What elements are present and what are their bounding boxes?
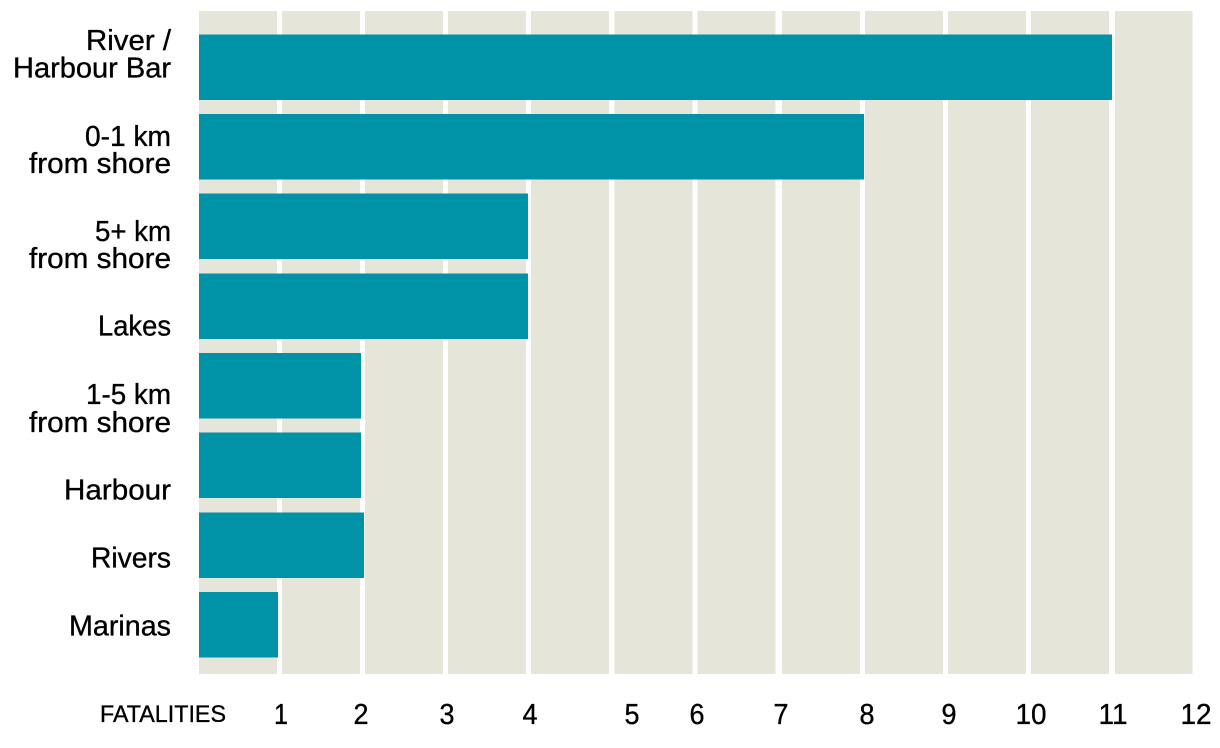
axis tick labels: 3 [440,699,454,731]
axis tick labels: 6 [690,699,704,731]
axis tick labels: 10 [1016,699,1046,731]
category labels [13,25,172,642]
axis tick labels: 11 [1098,699,1128,731]
category labels: Marinas [69,610,171,642]
category labels: from shore [29,243,171,275]
category labels: 5+ km [95,216,171,248]
axis tick labels: 1 [274,699,288,731]
category labels: Lakes [98,310,171,342]
bars [199,34,1112,658]
axis tick labels: 7 [774,699,788,731]
category labels: 1-5 km [86,379,171,411]
category labels: Rivers [91,542,171,574]
category labels: 0-1 km [85,121,171,153]
axis tick labels: 4 [522,699,538,731]
axis tick labels: 2 [354,699,368,731]
category labels: Harbour Bar [13,52,172,84]
axis tick labels: 12 [1180,699,1212,731]
axis tick labels: 8 [860,699,874,731]
axis title: FATALITIES [100,701,226,728]
category labels: River / [86,25,171,57]
axis tick labels: 5 [624,699,640,731]
grid background columns [199,11,1192,674]
category labels: from shore [29,407,171,439]
category labels: Harbour [64,474,172,506]
axis tick labels [274,699,1212,731]
category labels: from shore [29,148,171,180]
axis tick labels: 9 [942,699,956,731]
